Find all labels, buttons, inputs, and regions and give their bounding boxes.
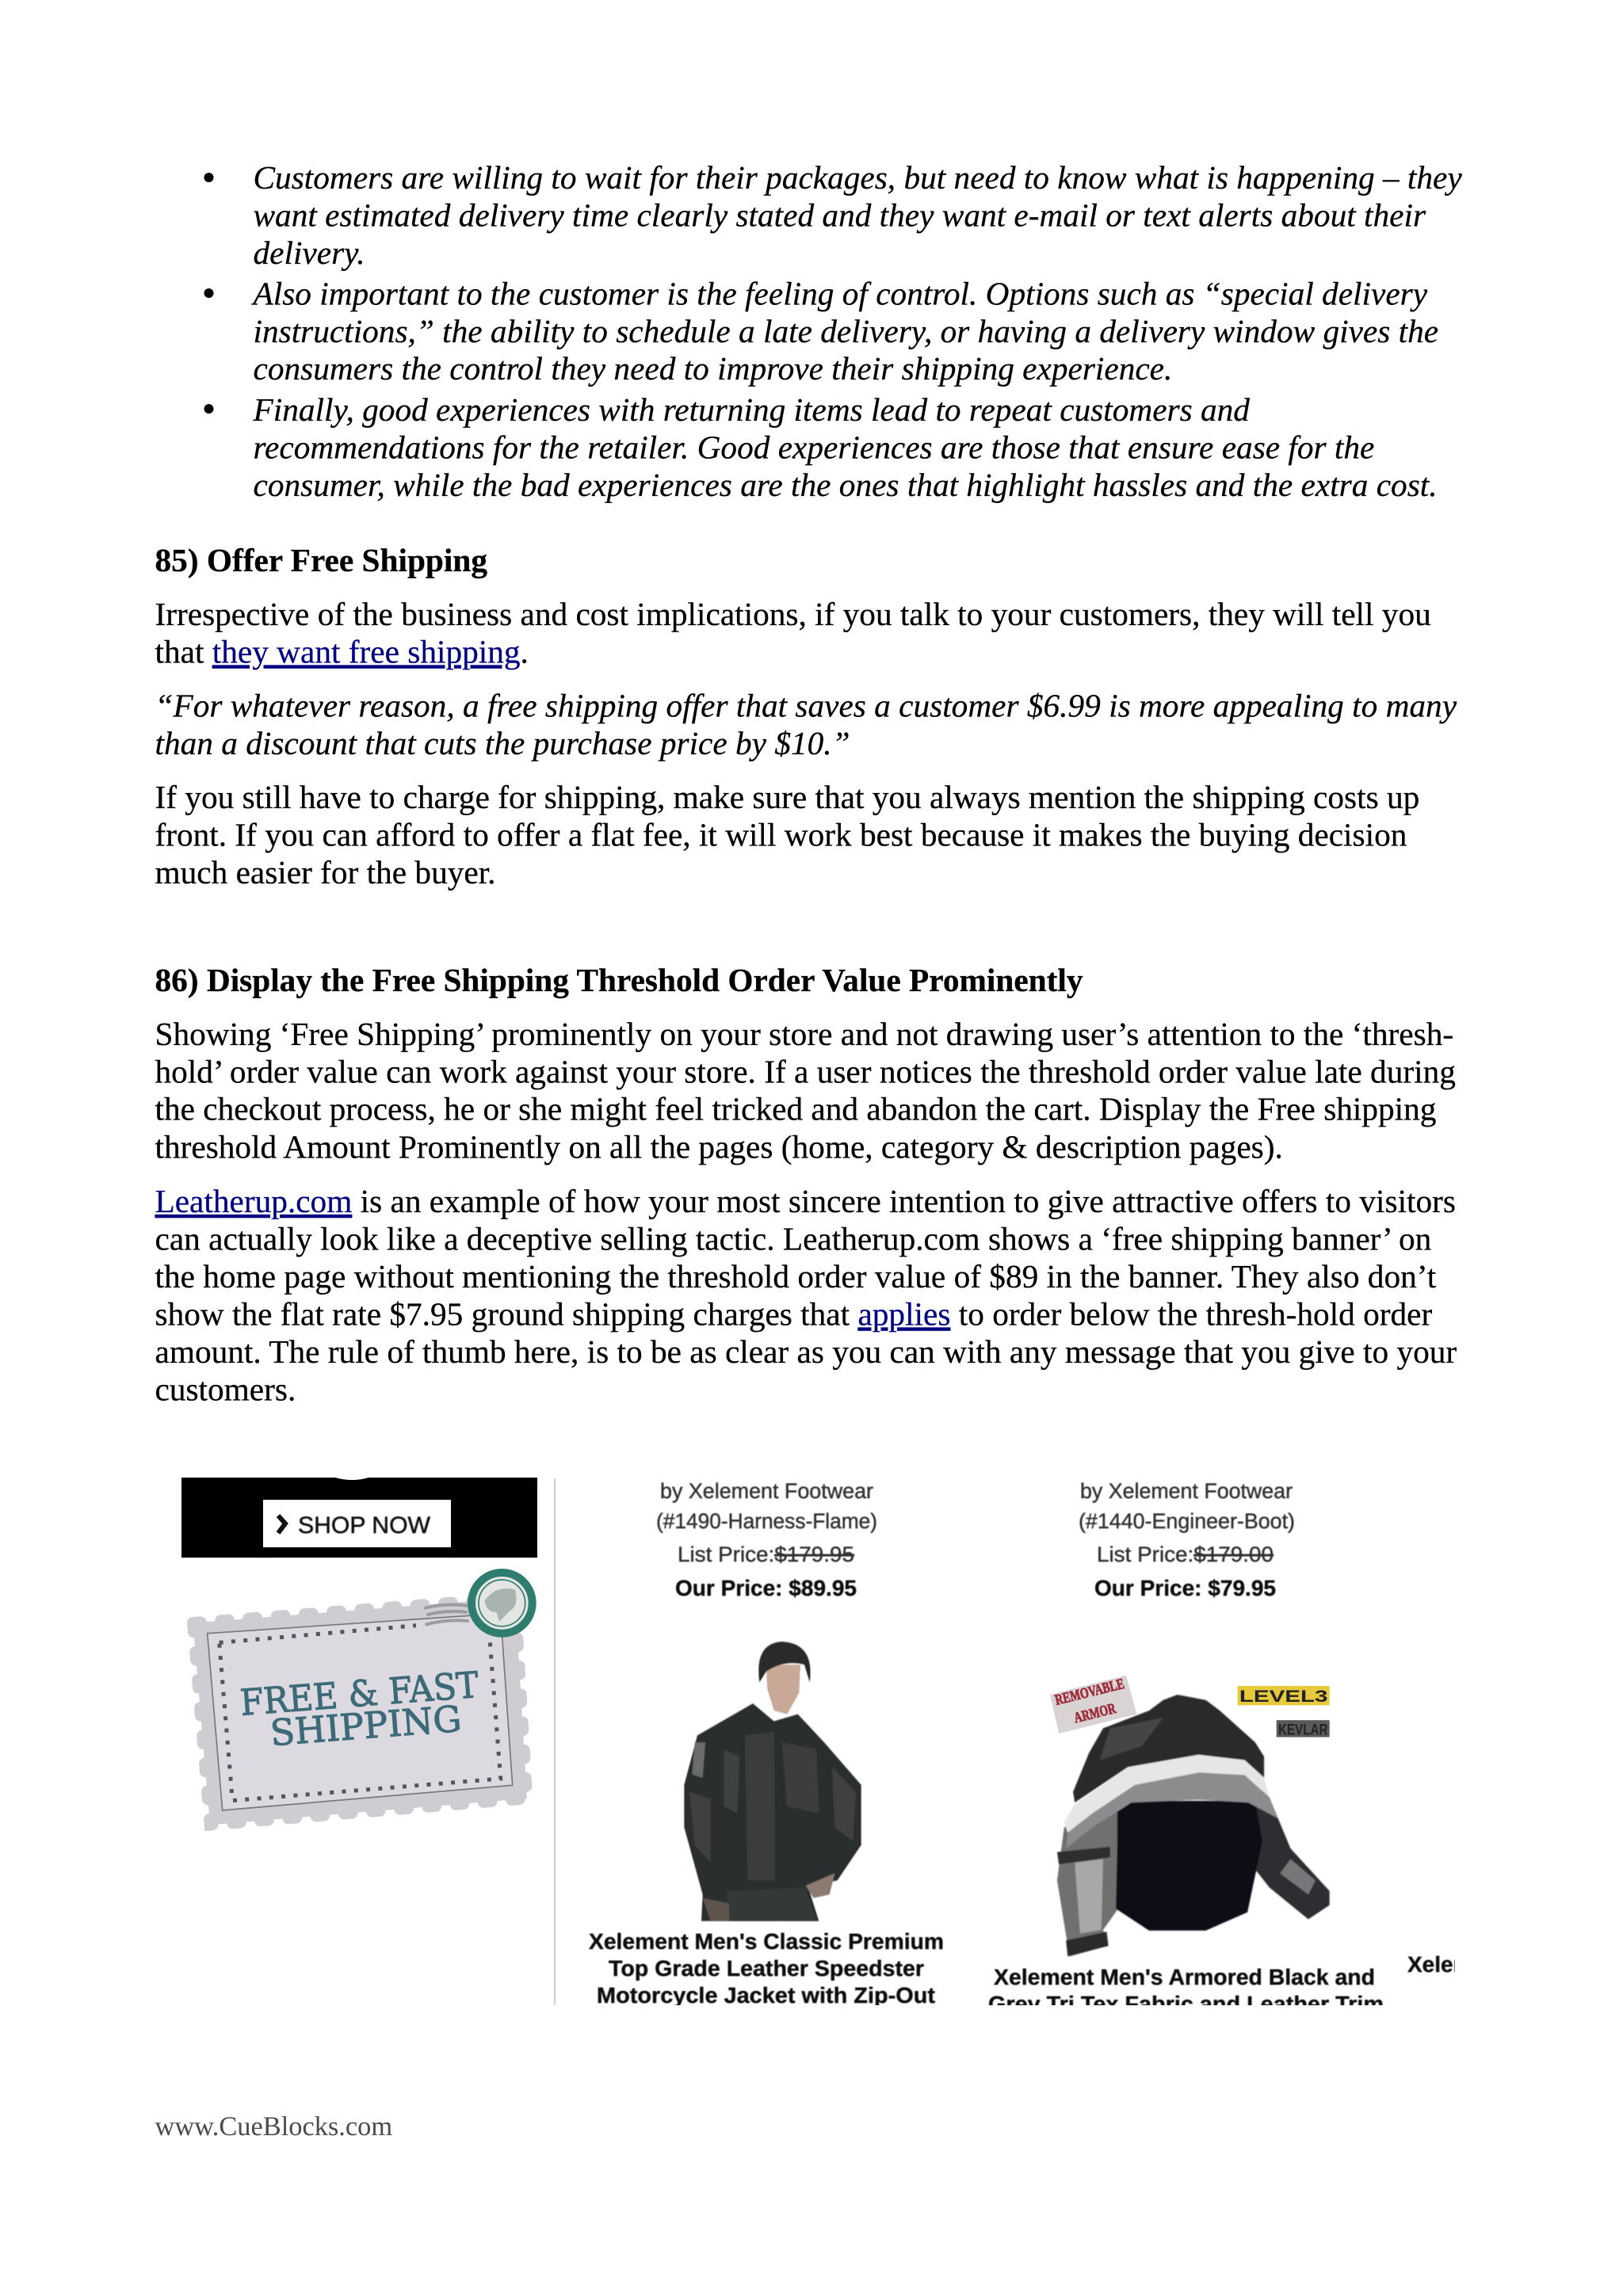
product 2 title: Grey Tri Tex Fabric and Leather Trim [988,1992,1384,2016]
bullet 1: delivery. [254,235,365,271]
product 1 details: List Price:$179.95 [678,1543,854,1566]
badge: level 3: LEVEL3 [1239,1687,1328,1706]
product 1 details: by Xelement Footwear [660,1479,873,1503]
paragraph: shipping costs: front. If you can afford to offer a flat fee, it will work best because it makes the buying decision [155,816,1407,852]
badge: removable armor: REMOVABLE [1053,1676,1126,1709]
bullet 2: instructions,” the ability to schedule a late delivery, or having a delivery window gives the [254,313,1438,349]
bullet list [204,159,1462,503]
bullet 3 [204,391,1438,503]
product 2 title: Xelement Men's Armored Black and [994,1965,1375,1989]
product 2 photo: armored jacket [1050,1675,1330,1956]
paragraph: free shipping demand: that they want free shipping. [155,634,529,670]
product 1 details [656,1479,877,1600]
paragraph: threshold [155,1016,1456,1165]
product 2 details: (#1440-Engineer-Boot) [1079,1509,1295,1533]
bullet 3: recommendations for the retailer. Good experiences are those that ensure ease for the [254,429,1374,466]
paragraph: Leatherup example [155,1183,1457,1407]
screenshot: Leatherup store [181,1478,1506,2016]
product 2 details: by Xelement Footwear [1080,1479,1293,1503]
column divider [554,1478,556,2005]
paragraph: threshold: the checkout process, he or she might feel tricked and abandon the cart. Display the Free shipping [155,1090,1436,1127]
product 1 title: Xelement Men's Classic Premium [589,1929,944,1954]
quote [155,688,1457,761]
product 1 details: (#1490-Harness-Flame) [656,1509,877,1533]
product 1 photo: man in leather jacket [684,1642,861,1921]
paragraph: Leatherup example: customers. [155,1371,296,1407]
heading: 86: 86) Display the Free Shipping Threshold Order Value Prominently [155,962,1083,999]
paragraph: Leatherup example: Leatherup.com is an example of how your most sincere intention to give attractive offers to visitors [155,1183,1456,1219]
bullet 2 [204,276,1438,387]
paragraph: shipping costs [155,779,1419,891]
stamp: free and fast shipping: FREE & FAST [239,1664,480,1724]
bullet 2: Also important to the customer is the feeling of control. Options such as “special delivery [250,276,1428,312]
paragraph: free shipping demand: Irrespective of the business and cost implications, if you talk to your customers, they will tell you [155,596,1431,632]
paragraph: Leatherup example: the home page without mentioning the threshold order value of $89 in the banner. They also don’t [155,1258,1437,1295]
product 2 title [988,1968,1384,2005]
product column 1 [589,1479,944,2008]
bullet 2: consumers the control they need to improve their shipping experience. [254,350,1172,387]
banner: shop now: SHOP NOW [298,1512,431,1539]
product 1 title: Top Grade Leather Speedster [609,1956,924,1981]
bullet 1: Customers are willing to wait for their packages, but need to know what is happening – they [254,159,1462,196]
product column 2 [988,1479,1384,2016]
quote: than a discount that cuts the purchase price by $10.” [155,725,850,761]
footer: www.CueBlocks.com [155,2111,392,2142]
stamp: free and fast shipping [193,1573,533,1825]
bullet 3: Finally, good experiences with returning items lead to repeat customers and [252,391,1250,428]
product 2 details [1079,1479,1295,1600]
quote: “For whatever reason, a free shipping offer that saves a customer $6.99 is more appealing to many [155,688,1457,724]
paragraph: Leatherup example: show the flat rate $7.95 ground shipping charges that applies to order below the thresh-hold order [155,1296,1432,1333]
paragraph: threshold: threshold Amount Prominently on all the pages (home, category & description pages). [155,1128,1283,1165]
paragraph: shipping costs: If you still have to charge for shipping, make sure that you always mention the shipping costs up [155,779,1419,815]
paragraph: shipping costs: much easier for the buyer. [155,854,496,891]
paragraph: threshold: hold’ order value can work against your store. If a user notices the threshold order value late during [155,1054,1456,1090]
bullet 3: consumer, while the bad experiences are the ones that highlight hassles and the extra cost. [254,467,1438,503]
badge: level 3 [1238,1686,1330,1706]
heading: 85: 85) Offer Free Shipping [155,542,487,579]
product 2 details: Our Price: $79.95 [1094,1576,1276,1600]
product 2 details: List Price:$179.00 [1097,1543,1274,1566]
badge: removable armor: ARMOR [1072,1700,1118,1726]
badge: kevlar: KEVLAR [1278,1721,1327,1738]
bullet 1: want estimated delivery time clearly stated and they want e-mail or text alerts about their [254,196,1426,233]
paragraph: free shipping demand [155,596,1431,670]
product column 3: clipped title: Xelement [1407,1952,1506,1977]
paragraph: Leatherup example: can actually look like a deceptive selling tactic. Leatherup.com shows a ‘free shipping banner’ on [155,1220,1432,1257]
paragraph: Leatherup example: amount. The rule of thumb here, is to be as clear as you can with any message that you give to your [155,1333,1457,1370]
badge: removable armor [1050,1675,1136,1733]
stamp: free and fast shipping: SHIPPING [269,1698,463,1754]
paragraph: threshold: Showing ‘Free Shipping’ prominently on your store and not drawing user’s attention to the ‘thresh- [155,1016,1453,1052]
product 1 details: Our Price: $89.95 [675,1576,857,1600]
bullet 1 [204,159,1462,271]
banner: shop now [181,1478,537,1558]
product 1 title: Motorcycle Jacket with Zip-Out [597,1983,935,2008]
product 1 title [589,1929,944,2008]
